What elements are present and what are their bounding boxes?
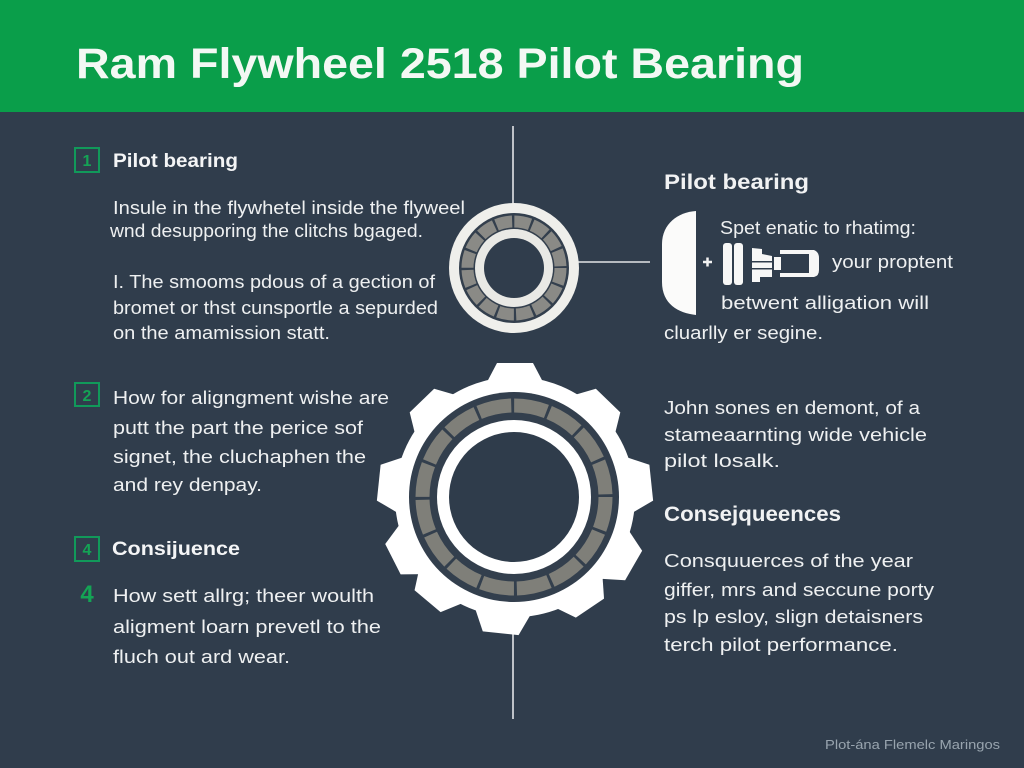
text block: specification: cluarlly er segine.	[664, 323, 823, 343]
text block: specification: your proptent	[832, 252, 953, 272]
text block: alignment: How for aligngment wishe are	[113, 388, 389, 408]
text block: description: I. The smooms pdous of a gection of	[113, 272, 436, 292]
text block: vehicle	[664, 398, 927, 471]
badge 1	[75, 148, 99, 172]
text block: specification: Spet enatic to rhatimg:	[720, 218, 916, 238]
text block: alignment	[113, 388, 389, 495]
badge 2	[75, 383, 99, 406]
connector line: to right panel	[578, 261, 650, 263]
text block: description	[113, 272, 438, 343]
text block: description: on the amamission statt.	[113, 323, 330, 343]
connector line: bottom	[512, 632, 514, 719]
text block: consequences	[664, 551, 934, 655]
heading: consequences: Consejqueences	[664, 503, 841, 526]
heading: pilot bearing: Pilot bearing	[113, 151, 238, 172]
title: Ram Flywheel 2518 Pilot Bearing	[76, 40, 804, 88]
text block: alignment: and rey denpay.	[113, 475, 262, 495]
footer: Plot-ána Flemelc Maringos	[825, 738, 1000, 752]
text block: intro: Insule in the flywhetel inside the flyweel	[113, 198, 465, 218]
text block: consequences: terch pilot performance.	[664, 635, 898, 655]
icon: large gear	[376, 363, 654, 636]
text block: intro	[109, 198, 465, 241]
badge 4: 4	[83, 542, 92, 559]
badge 1: 1	[83, 153, 92, 170]
icon: plus	[703, 258, 712, 266]
text block: specification: betwent alligation will	[721, 293, 929, 313]
text block: intro: wnd desupporing the clitchs bgaged.	[109, 221, 423, 241]
icon: drivetrain parts	[723, 243, 819, 285]
heading: pilot bearing right: Pilot bearing	[664, 171, 809, 194]
text block: vehicle: pilot losalk.	[664, 451, 780, 471]
text block: wear	[113, 586, 381, 667]
title banner	[0, 0, 1024, 112]
text block: wear: How sett allrg; theer woulth	[113, 586, 374, 606]
text block: alignment: putt the part the perice sof	[113, 418, 364, 438]
icon: pilot bearing	[449, 203, 579, 333]
text block: consequences: Consquuerces of the year	[664, 551, 913, 571]
badge 2: 2	[83, 388, 92, 405]
text block: wear: aligment loarn prevetl to the	[113, 617, 381, 637]
panel: left column	[75, 148, 465, 667]
heading: consequence: Consijuence	[112, 539, 240, 560]
text block: wear: fluch out ard wear.	[113, 647, 290, 667]
numeral 4: 4	[80, 581, 94, 608]
text block: consequences: ps lp esloy, slign detaisners	[664, 607, 923, 627]
text block: consequences: giffer, mrs and seccune porty	[664, 580, 934, 600]
connector line: top	[512, 126, 514, 204]
panel: right column	[662, 171, 953, 655]
text block: specification	[664, 218, 953, 343]
text block: description: bromet or thst cunsportle a sepurded	[113, 298, 438, 318]
text block: vehicle: John sones en demont, of a	[664, 398, 921, 418]
text block: vehicle: stameaarnting wide vehicle	[664, 425, 927, 445]
icon: bearing half section	[662, 211, 696, 315]
badge 4	[75, 537, 99, 561]
text block: alignment: signet, the cluchaphen the	[113, 447, 366, 467]
